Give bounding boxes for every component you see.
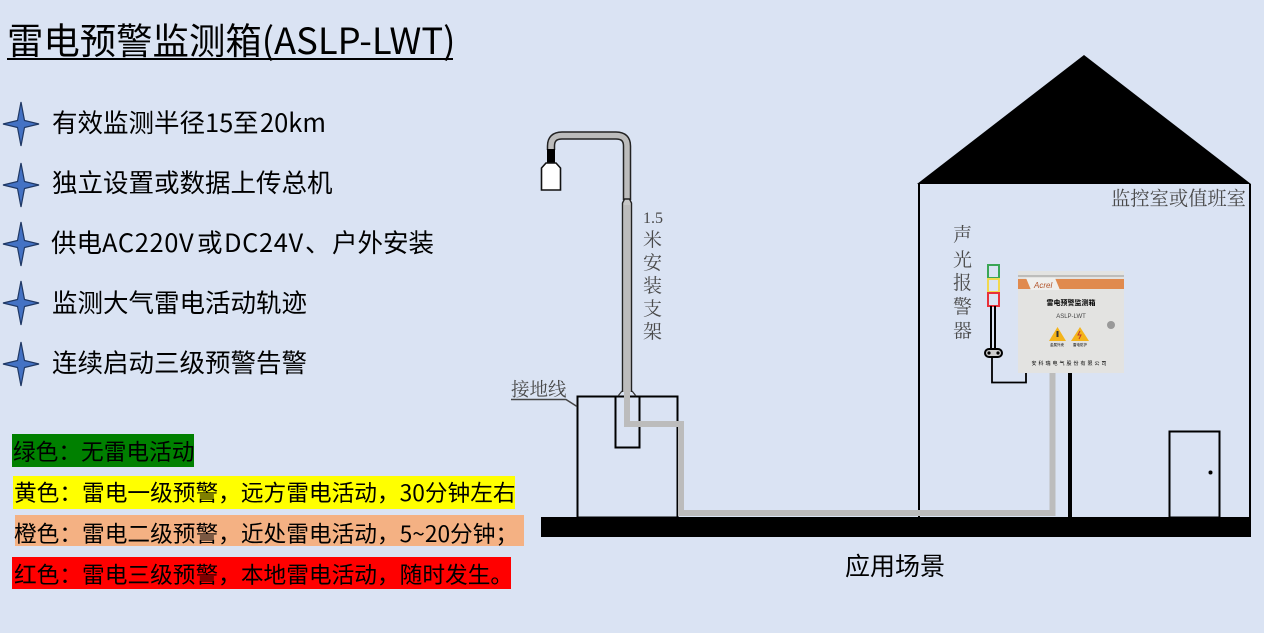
- alarm label: 警: [953, 296, 972, 318]
- monitoring box: ASLP-LWT: [1056, 314, 1086, 320]
- icon: star bullet 3: [3, 222, 39, 266]
- scene caption: 应用场景: [845, 547, 945, 583]
- alarm label: 器: [953, 320, 972, 342]
- alarm label: 光: [953, 249, 972, 271]
- icon: star bullet 2: [3, 163, 39, 207]
- monitoring box: [1018, 271, 1124, 373]
- feature 3: 或: [197, 223, 223, 260]
- legend: yellow: 黄色：雷电一级预警，远方雷电活动，30分钟左右: [14, 475, 516, 508]
- feature 4: 监测大气雷电活动轨迹: [52, 283, 307, 320]
- feature 3: DC24V: [224, 223, 304, 260]
- walls: [919, 184, 1250, 517]
- alarm label: [953, 224, 972, 342]
- house: [917, 55, 1251, 517]
- black power line: [1068, 373, 1072, 518]
- feature list: [3, 102, 434, 386]
- monitoring box: Acrel: [1033, 281, 1052, 290]
- ground wire label: 接地线: [511, 380, 567, 401]
- feature 1: 有效监测半径: [52, 103, 205, 140]
- mounting pole and sensor: [542, 136, 636, 396]
- door: [1170, 432, 1220, 518]
- alarm label: 声: [953, 224, 972, 246]
- icon: star bullet 1: [3, 102, 39, 146]
- feature 3: 户外安装: [332, 223, 434, 260]
- pole label: 装: [643, 275, 662, 297]
- pole label: 支: [643, 298, 662, 320]
- monitoring box: 雷电防护: [1073, 342, 1088, 348]
- icon: star bullet 4: [3, 281, 39, 325]
- feature 5: 连续启动三级预警告警: [52, 343, 307, 380]
- pole label: 米: [643, 229, 662, 251]
- pole label: 安: [643, 252, 662, 274]
- pole label: [643, 210, 663, 343]
- monitoring box: 安科瑞电气股份有限公司: [1031, 360, 1109, 367]
- room label: 监控室或值班室: [1111, 188, 1246, 210]
- ground wire label: [511, 380, 577, 406]
- feature 1: 15: [205, 103, 233, 140]
- legend: red: 红色：雷电三级预警，本地雷电活动，随时发生。: [14, 557, 513, 590]
- ground slab: [541, 517, 1251, 537]
- feature 1: 至: [233, 103, 259, 140]
- feature 3: AC220V: [102, 223, 194, 260]
- legend: alarm levels: [12, 434, 524, 590]
- feature 2: 独立设置或数据上传总机: [52, 163, 333, 200]
- feature 3: 、: [305, 223, 331, 260]
- monitoring box: 雷电预警监测箱: [1046, 298, 1096, 308]
- alarm label: 报: [953, 272, 972, 294]
- pole label: 架: [643, 321, 662, 343]
- title: 雷电预警监测箱(ASLP-LWT): [7, 13, 455, 65]
- diagram: application scene: [511, 55, 1251, 583]
- feature 1: 20km: [260, 103, 326, 140]
- sound and light alarm: [985, 265, 1026, 382]
- pole label: 1.5: [643, 210, 663, 227]
- feature 3: 供电: [51, 223, 102, 260]
- legend: green: 绿色：无雷电活动: [13, 434, 194, 467]
- legend: orange: 橙色：雷电二级预警，近处雷电活动，5~20分钟；: [14, 516, 518, 549]
- monitoring box: 金属外壳: [1050, 342, 1064, 348]
- ground wire: [627, 205, 1052, 513]
- roof: [917, 55, 1251, 184]
- foundation box: [578, 396, 678, 518]
- icon: star bullet 5: [3, 342, 39, 386]
